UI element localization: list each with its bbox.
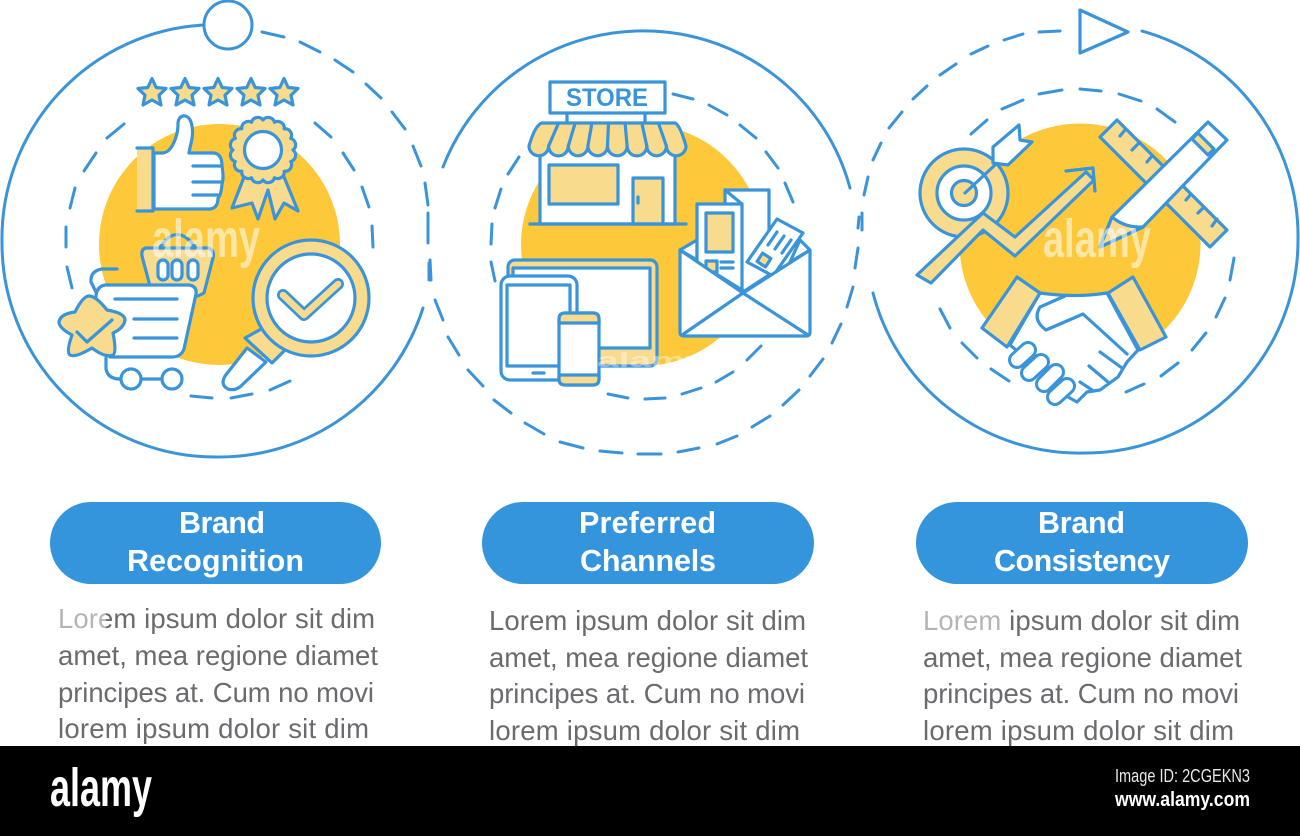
yellow disc: channels	[521, 124, 763, 366]
watermark: recognition: alamy	[152, 209, 260, 269]
icon: envelope with letters	[680, 190, 810, 336]
yellow disc: recognition	[99, 124, 340, 365]
icon: star badge with check	[59, 296, 125, 356]
icon: magnifier with check	[223, 240, 369, 390]
inner dashed ring: consistency	[940, 89, 1234, 392]
outer ring: channels	[430, 31, 859, 454]
inner dashed ring: recognition	[66, 123, 373, 398]
panel: brand consistency graphic	[862, 10, 1298, 453]
text block: column 1: lorem ipsum dolor sit dim	[58, 713, 369, 744]
text block: column 3: Lorem ipsum dolor sit dim	[923, 605, 1240, 636]
icon: rising arrow	[917, 168, 1095, 283]
text block: column 3: lorem ipsum dolor sit dim	[923, 715, 1234, 746]
store sign	[550, 82, 665, 113]
watermark fades over text	[58, 606, 1000, 632]
pill: brand recognition	[50, 502, 381, 584]
icon: shopping basket	[142, 234, 213, 296]
text block: column 2	[489, 605, 808, 746]
icon: award rosette	[230, 117, 298, 219]
pill: preferred channels: Channels	[580, 544, 716, 578]
icon: shopping cart	[91, 269, 196, 389]
text block: column 3: amet, mea regione diamet	[923, 642, 1242, 673]
icon: ruler and pencil	[1100, 120, 1227, 247]
text block: column 2: principes at. Cum no movi	[489, 678, 805, 709]
pill: preferred channels	[482, 502, 814, 584]
image id: Image ID: 2CGEKN3	[1115, 766, 1250, 786]
footer bar	[0, 746, 1300, 836]
marker circle	[204, 1, 252, 49]
icon: handshake	[982, 277, 1166, 402]
icon: store	[529, 82, 686, 224]
triangle marker	[1080, 10, 1128, 53]
panel: brand recognition graphic	[2, 1, 429, 457]
text block: column 1: principes at. Cum no movi	[58, 677, 374, 708]
text block: column 1: amet, mea regione diamet	[58, 640, 378, 671]
watermark: channels: alamy	[597, 350, 709, 372]
outer ring: consistency	[862, 31, 1298, 453]
text block: column 3: principes at. Cum no movi	[923, 678, 1239, 709]
text block: column 2: lorem ipsum dolor sit dim	[489, 715, 800, 746]
icon: devices	[501, 260, 657, 385]
pill: preferred channels: Preferred	[579, 506, 716, 540]
pill: brand recognition: Recognition	[127, 544, 304, 578]
icon: target with arrow	[920, 125, 1032, 237]
website: www.alamy.com	[1114, 789, 1250, 811]
yellow disc: consistency	[960, 124, 1200, 364]
text block: column 2: amet, mea regione diamet	[489, 642, 808, 673]
pill: brand consistency	[916, 502, 1248, 584]
outer ring: recognition	[2, 25, 429, 457]
store sign: STORE	[566, 84, 648, 112]
pill: brand consistency: Consistency	[994, 544, 1170, 578]
panel: preferred channels graphic	[430, 31, 859, 454]
text block: column 3	[923, 605, 1242, 746]
text block: column 1: Lorem ipsum dolor sit dim	[58, 603, 375, 634]
footer logo: alamy	[50, 758, 152, 818]
watermark: consistency: alamy	[1043, 209, 1151, 269]
pill: brand recognition: Brand	[179, 506, 265, 540]
pill: brand consistency: Brand	[1038, 506, 1125, 540]
icon: five stars	[138, 78, 298, 105]
text block: column 2: Lorem ipsum dolor sit dim	[489, 605, 806, 636]
inner dashed ring: channels	[491, 94, 793, 399]
icon: thumbs up	[137, 116, 223, 211]
text block: column 1	[58, 603, 378, 744]
